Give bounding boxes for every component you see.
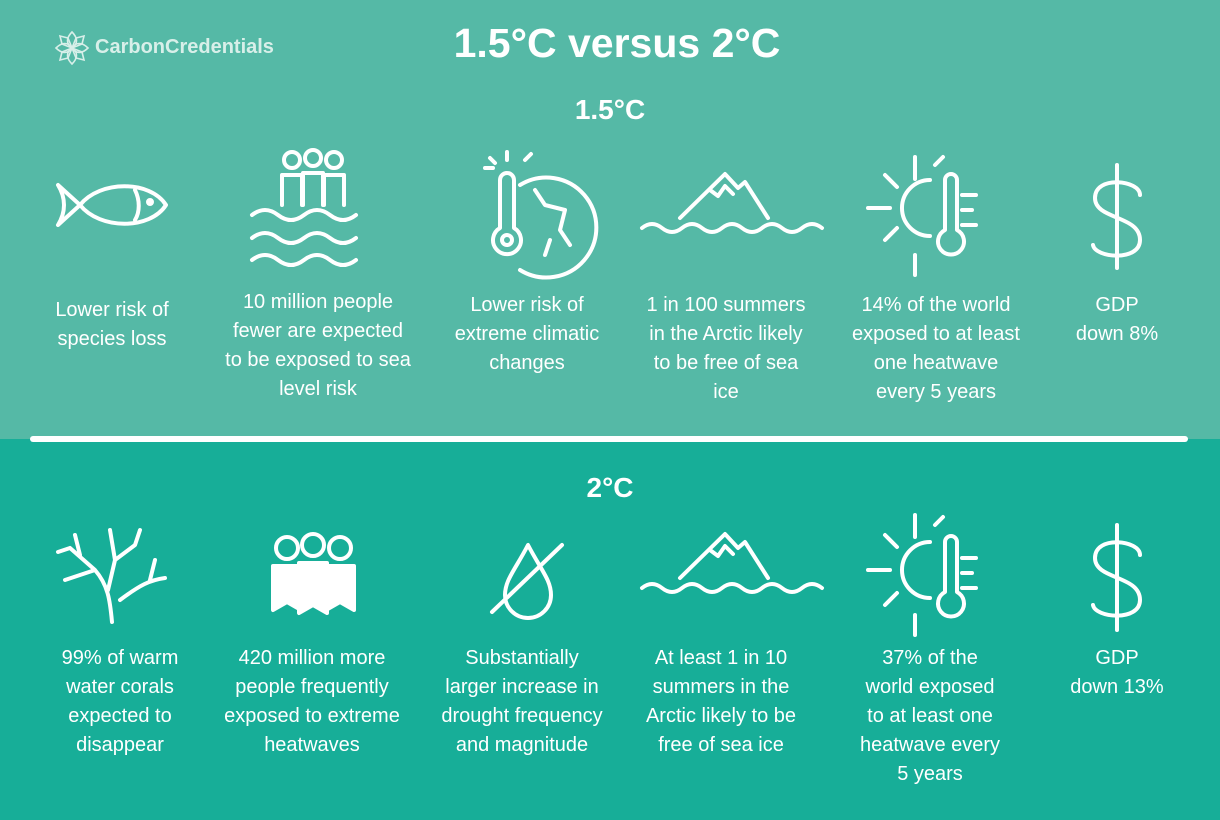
icon: mountain ice 2 [642, 534, 822, 592]
text: fewer are expected [233, 320, 403, 342]
icon: thermometer globe [485, 152, 596, 278]
text: extreme climatic [455, 323, 599, 345]
text: larger increase in [445, 676, 599, 698]
icon: sun thermometer 1 [868, 157, 976, 275]
text: heatwaves [264, 734, 360, 756]
text: world exposed [866, 676, 994, 698]
text 1.5 row [55, 299, 169, 350]
heading 1.5: 1.5°C [575, 94, 645, 125]
text: to be free of sea [654, 352, 798, 374]
text: 5 years [897, 763, 963, 785]
text 2 row: water corals [66, 676, 174, 698]
text 1.5 row: Lower risk of [55, 299, 169, 321]
text: ice [713, 381, 739, 403]
text: and magnitude [456, 734, 588, 756]
text 1.5 row: species loss [58, 328, 166, 350]
text: free of sea ice [658, 734, 784, 756]
icon: dollar 2 [1093, 525, 1140, 630]
icon: dollar 1 [1093, 165, 1140, 268]
text: summers in the [653, 676, 789, 698]
text: 1 in 100 summers [647, 294, 805, 316]
text: At least 1 in 10 [655, 647, 787, 669]
text: Arctic likely to be [646, 705, 796, 727]
heading 2: 2°C [586, 472, 634, 503]
text: changes [489, 352, 565, 374]
text: every 5 years [876, 381, 996, 403]
text: Substantially [465, 647, 579, 669]
text: to at least one [867, 705, 993, 727]
text 2 row: expected to [68, 705, 172, 727]
text: to be exposed to sea [225, 349, 411, 371]
text 2 row: disappear [76, 734, 164, 756]
text: 37% of the [882, 647, 978, 669]
icon: people and waves [252, 150, 356, 265]
text: in the Arctic likely [649, 323, 803, 345]
text: one heatwave [874, 352, 998, 374]
text: 10 million people [243, 291, 393, 313]
text: 14% of the world [862, 294, 1010, 316]
icon: people [273, 534, 354, 613]
divider line [30, 436, 1188, 442]
text: level risk [279, 378, 357, 400]
logo: CarbonCredentials [95, 36, 274, 58]
icon: coral [58, 530, 165, 622]
text 2 row: 99% of warm [62, 647, 178, 669]
text: GDP [1095, 294, 1139, 316]
text: GDP [1095, 647, 1139, 669]
text: exposed to at least [852, 323, 1020, 345]
icon: mountain ice 1 [642, 174, 822, 232]
logo [55, 31, 274, 65]
text: people frequently [235, 676, 389, 698]
text: down 8% [1076, 323, 1158, 345]
icon: sun thermometer 2 [868, 515, 976, 635]
text: Lower risk of [470, 294, 584, 316]
text: drought frequency [441, 705, 603, 727]
text 2 row [62, 647, 178, 756]
text: down 13% [1070, 676, 1164, 698]
text: exposed to extreme [224, 705, 400, 727]
text: heatwave every [860, 734, 1000, 756]
icon: fish [58, 185, 166, 225]
icon: no drop [492, 545, 562, 618]
title: 1.5°C versus 2°C [454, 20, 780, 66]
text: 420 million more [239, 647, 385, 669]
